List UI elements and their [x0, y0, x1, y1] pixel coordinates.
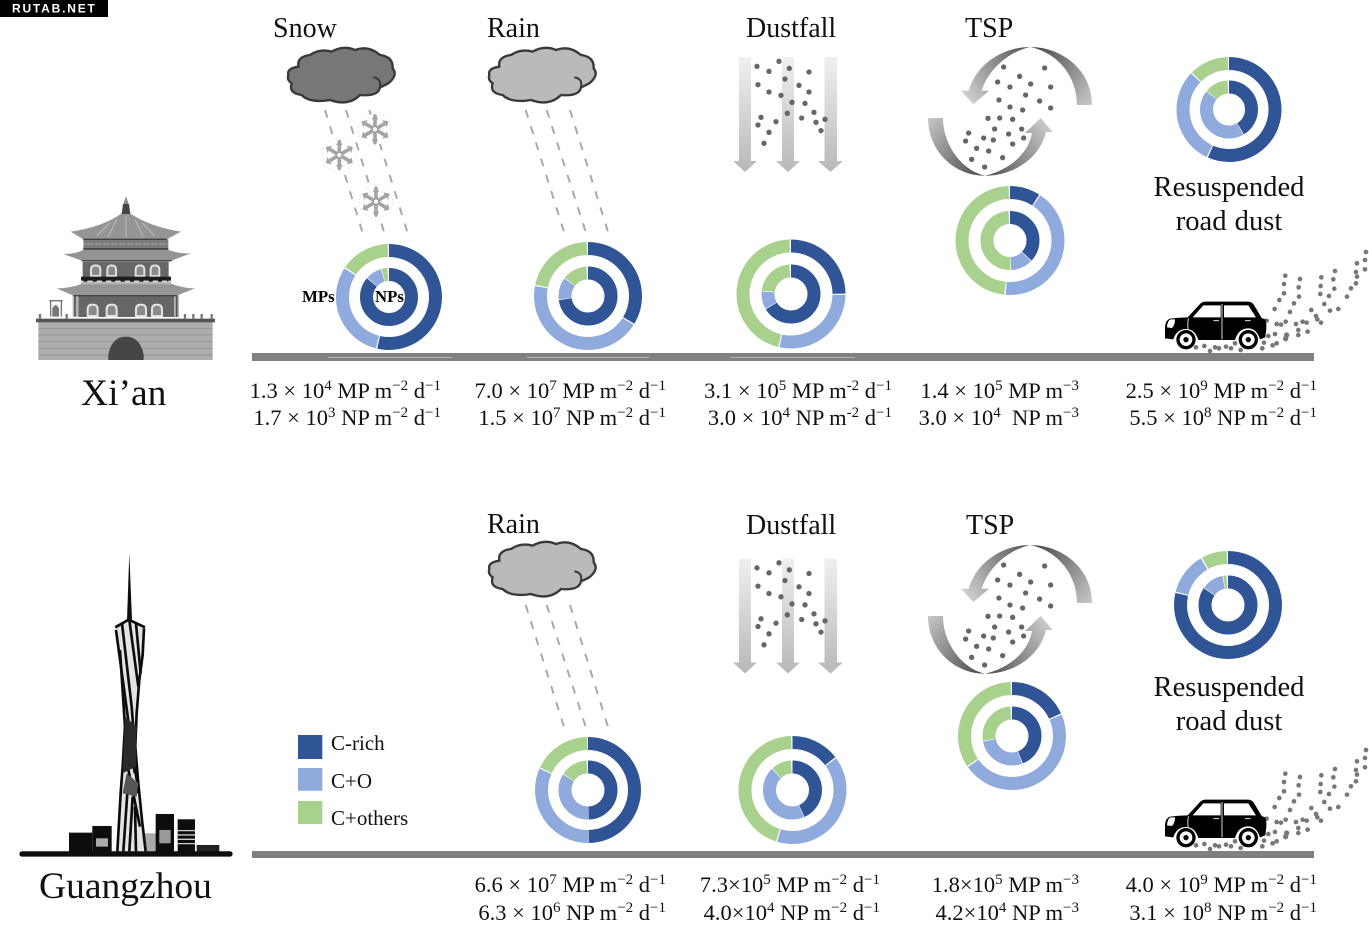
flux values: snow: 4	[324, 378, 332, 394]
flux values: road dust: NP m	[1212, 900, 1269, 925]
flux values: road dust: 3.1 × 10	[1129, 900, 1204, 925]
flux values: dustfall: -2	[847, 405, 859, 421]
city name: Guangzhou: Guangzhou	[39, 866, 212, 907]
flux values: dustfall: 3.0 × 10	[708, 405, 782, 430]
flux values: dustfall: −2	[831, 900, 847, 916]
flux values: rain: d	[633, 872, 650, 897]
flux values: road dust: −1	[1301, 378, 1317, 394]
flux values: road dust: 5.5 × 10	[1129, 405, 1204, 430]
panel: Xi'an resuspended road dust	[1126, 64, 1368, 430]
icon: Canton Tower skyline	[19, 553, 233, 857]
flux values: dustfall: -2	[847, 378, 859, 394]
flux values: dustfall: −2	[831, 872, 847, 888]
flux values: dustfall: NP m	[790, 405, 847, 430]
flux values: dustfall: d	[859, 405, 876, 430]
flux values: snow: −2	[392, 405, 408, 421]
heading: dustfall: Dustfall	[746, 13, 836, 44]
flux values: road dust: −2	[1268, 405, 1284, 421]
flux values: rain: d	[633, 405, 650, 430]
flux values: road dust: 4.0 × 10	[1126, 872, 1200, 897]
flux values: TSP: 1.4 × 10	[921, 378, 995, 403]
flux values: TSP: −3	[1063, 405, 1079, 421]
panel: Xi'an snow	[250, 13, 441, 430]
watermark badge	[0, 0, 108, 17]
flux values: rain: 7	[549, 872, 557, 888]
flux values: road dust	[1126, 872, 1317, 925]
heading: dustfall: Dustfall	[746, 510, 836, 541]
flux values: snow: MP m	[332, 378, 393, 403]
flux values: TSP	[932, 872, 1079, 925]
flux values: road dust: −1	[1301, 900, 1317, 916]
icon: falling arrows	[733, 558, 843, 674]
flux values: dustfall	[704, 378, 892, 430]
flux values: TSP: 5	[995, 872, 1003, 888]
flux values: road dust: −2	[1268, 872, 1284, 888]
flux values: rain: 6.6 × 10	[475, 872, 549, 897]
flux values: rain: −1	[650, 872, 666, 888]
heading: resuspended road dust: road dust	[1176, 206, 1282, 237]
donut: snow MPs and NPs	[342, 250, 436, 344]
flux values: rain: −1	[650, 405, 666, 421]
flux values: TSP: 5	[995, 378, 1003, 394]
flux values: rain: 7	[553, 405, 561, 421]
flux values: rain: 7	[549, 378, 557, 394]
icon: rain cloud	[489, 48, 596, 102]
flux values: dustfall: NP m	[774, 900, 832, 925]
flux values: dustfall: 4	[767, 900, 775, 916]
flux values: TSP: 1.8×10	[932, 872, 995, 897]
flux values: road dust: −2	[1268, 900, 1284, 916]
flux values: TSP: 4.2×10	[936, 900, 999, 925]
flux values: TSP: MP m	[1003, 872, 1064, 897]
flux values: road dust: −2	[1268, 378, 1284, 394]
panel: Xi'an TSP	[919, 13, 1092, 430]
flux values: TSP: NP m	[1001, 405, 1064, 430]
flux values: dustfall	[700, 872, 880, 925]
heading: TSP: TSP	[966, 510, 1014, 541]
panel: Xi'an rain	[475, 13, 666, 430]
panel: Xi'an dustfall	[704, 13, 892, 430]
flux values: rain: −1	[650, 378, 666, 394]
icon: snow cloud	[288, 48, 395, 102]
icon: falling arrows	[733, 57, 843, 172]
donut: rain	[542, 744, 634, 836]
flux values: rain	[475, 378, 666, 430]
flux values: rain: d	[633, 900, 650, 925]
flux values: dustfall: 5	[763, 872, 771, 888]
label: NPs: NPs	[375, 287, 404, 306]
icon: dust particles	[754, 59, 828, 146]
flux values: TSP: MP m	[1003, 378, 1064, 403]
icon: car kicking up dust	[1165, 748, 1368, 851]
donut: road dust	[1180, 558, 1276, 652]
heading: snow: Snow	[273, 13, 338, 44]
flux values: road dust: NP m	[1212, 405, 1269, 430]
icon: car kicking up dust	[1165, 250, 1368, 353]
flux values: rain: −2	[617, 378, 633, 394]
flux values: road dust: MP m	[1208, 872, 1269, 897]
flux values: road dust	[1126, 378, 1317, 430]
flux values: road dust: d	[1284, 378, 1301, 403]
flux values: dustfall: MP m	[771, 872, 832, 897]
heading: resuspended road dust: road dust	[1176, 706, 1282, 737]
flux values: dustfall: 4	[782, 405, 790, 421]
flux values: snow: d	[408, 405, 425, 430]
flux values: road dust: d	[1284, 872, 1301, 897]
donut: road dust	[1183, 64, 1275, 156]
flux values: rain: NP m	[560, 405, 618, 430]
heading: resuspended road dust	[1154, 172, 1304, 237]
flux values: rain: MP m	[557, 378, 618, 403]
flux values: TSP	[919, 378, 1079, 430]
donut: TSP	[964, 688, 1060, 784]
panel: Guangzhou rain	[475, 509, 666, 925]
ground line: Xi'an	[252, 353, 1314, 361]
flux values: rain: −1	[650, 900, 666, 916]
flux values: road dust: −1	[1301, 405, 1317, 421]
city name: Xi'an: Xi’an	[81, 373, 167, 414]
flux values: rain: −2	[617, 405, 633, 421]
donut: rain	[540, 248, 636, 344]
heading: TSP: TSP	[965, 13, 1013, 44]
flux values: TSP: −3	[1063, 872, 1079, 888]
flux values: snow: 3	[328, 405, 336, 421]
icon: circulating arrows with particles	[928, 545, 1092, 674]
flux values: TSP: −3	[1063, 378, 1079, 394]
flux values: snow	[250, 378, 441, 430]
flux values: TSP: NP m	[1006, 900, 1064, 925]
icon: dust particles	[754, 560, 828, 647]
flux values: snow: d	[408, 378, 425, 403]
flux values: rain: NP m	[560, 900, 618, 925]
flux values: rain: −2	[617, 872, 633, 888]
icon: Xi'an bell tower	[36, 196, 215, 360]
flux values: TSP: 3.0 × 10	[919, 405, 993, 430]
icon: snowflakes	[323, 113, 393, 218]
flux values: dustfall: −1	[876, 405, 892, 421]
heading: resuspended road dust: Resuspended	[1154, 172, 1304, 203]
flux values: snow: −1	[425, 378, 441, 394]
heading: resuspended road dust	[1154, 672, 1304, 737]
donut: dustfall	[745, 742, 840, 838]
icon: circulating arrows with particles	[928, 47, 1092, 176]
flux values: rain	[475, 872, 666, 925]
panel: Guangzhou resuspended road dust	[1126, 558, 1368, 925]
flux values: dustfall: 3.1 × 10	[704, 378, 779, 403]
flux values: rain: 6	[553, 900, 561, 916]
flux values: snow: −2	[392, 378, 408, 394]
rain dashed lines	[526, 110, 609, 235]
flux values: rain: 1.5 × 10	[478, 405, 553, 430]
rain dashed lines	[526, 605, 609, 730]
flux values: road dust: MP m	[1208, 378, 1269, 403]
flux values: road dust: 8	[1204, 405, 1212, 421]
flux values: dustfall: d	[859, 378, 876, 403]
heading: rain: Rain	[487, 13, 540, 44]
heading: resuspended road dust: Resuspended	[1154, 672, 1304, 703]
ground line: Guangzhou	[252, 851, 1314, 858]
flux values: snow: 1.7 × 10	[253, 405, 328, 430]
flux values: dustfall: 4.0×10	[704, 900, 767, 925]
panel: Guangzhou TSP	[928, 510, 1092, 925]
flux values: road dust: 2.5 × 10	[1126, 378, 1200, 403]
flux values: road dust: d	[1284, 900, 1301, 925]
flux values: rain: d	[633, 378, 650, 403]
flux values: snow: NP m	[336, 405, 393, 430]
flux values: road dust: 9	[1200, 872, 1208, 888]
snow dashed trails	[325, 110, 408, 235]
icon: rain cloud	[489, 542, 596, 596]
heading: rain: Rain	[487, 509, 540, 540]
label: MPs: MPs	[302, 287, 335, 306]
donut: TSP	[962, 192, 1058, 288]
watermark badge: RUTAB.NET	[12, 2, 97, 16]
panel: Guangzhou dustfall	[700, 510, 880, 925]
flux values: road dust: d	[1284, 405, 1301, 430]
flux values: road dust: 8	[1204, 900, 1212, 916]
flux values: rain: 6.3 × 10	[478, 900, 553, 925]
flux values: TSP: 4	[993, 405, 1001, 421]
legend: C+O: C+O	[331, 769, 372, 793]
flux values: rain: MP m	[557, 872, 618, 897]
flux values: snow: −1	[425, 405, 441, 421]
flux values: dustfall: −1	[864, 900, 880, 916]
flux values: dustfall: 7.3×10	[700, 872, 763, 897]
flux values: rain: 7.0 × 10	[475, 378, 549, 403]
legend: C+others: C+others	[331, 806, 408, 830]
flux values: TSP: 4	[999, 900, 1007, 916]
flux values: dustfall: −1	[876, 378, 892, 394]
flux values: dustfall: −1	[864, 872, 880, 888]
flux values: road dust: 9	[1200, 378, 1208, 394]
flux values: dustfall: d	[847, 900, 864, 925]
flux values: rain: −2	[617, 900, 633, 916]
flux values: road dust: −1	[1301, 872, 1317, 888]
donut: dustfall	[743, 246, 839, 342]
flux values: dustfall: 5	[779, 378, 786, 394]
legend	[298, 731, 408, 830]
flux values: dustfall: MP m	[786, 378, 847, 403]
legend: C-rich: C-rich	[331, 731, 385, 755]
flux values: dustfall: d	[847, 872, 864, 897]
flux values: snow: 1.3 × 10	[250, 378, 324, 403]
flux values: TSP: −3	[1063, 900, 1079, 916]
